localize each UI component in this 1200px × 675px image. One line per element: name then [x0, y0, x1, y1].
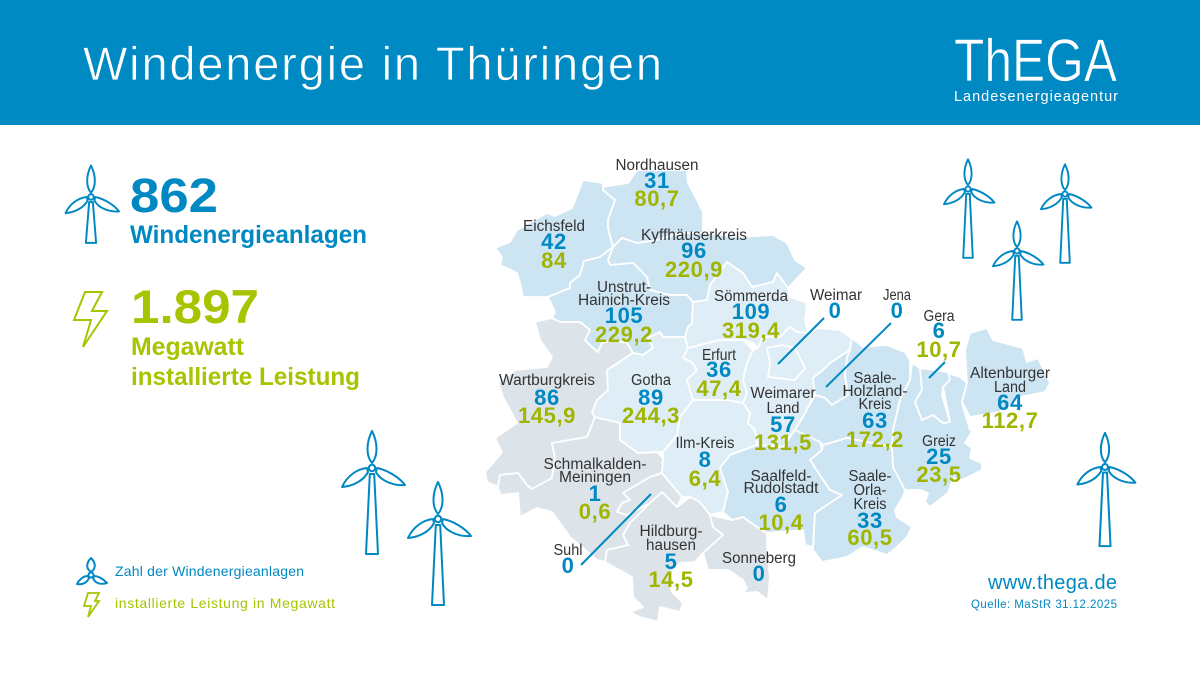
label: Saale-Holzland-Kreis — [842, 370, 908, 452]
label: Saale-Orla-Kreis: Kreis — [854, 496, 887, 513]
label: Greiz: 23,5 — [916, 462, 962, 487]
region: Erfurt — [683, 340, 753, 403]
label: Saalfeld-Rudolstadt — [744, 468, 819, 535]
label: Weimar: Weimar — [810, 287, 862, 304]
label: Hildburghausen: Hildburg- — [640, 523, 702, 540]
label: Erfurt: 36 — [706, 357, 732, 382]
title: Windenergie in Thüringen — [83, 37, 662, 90]
icon: wind turbine, bottom left 1 — [342, 431, 405, 554]
label: Saale-Holzland-Kreis: Saale- — [854, 370, 896, 387]
total turbines: Windenergieanlagen — [130, 221, 367, 249]
icon: wind turbine, top right 2 — [1041, 164, 1091, 263]
label: Saalfeld-Rudolstadt: Saalfeld- — [750, 468, 812, 485]
label: Hildburghausen: 5 — [665, 549, 677, 574]
total megawatt — [131, 280, 360, 391]
legend — [77, 558, 335, 617]
legend text: megawatt: installierte Leistung in Megawatt — [115, 595, 335, 611]
icon: legend bolt — [84, 593, 99, 617]
icon: wind turbine, top right 1 — [944, 159, 994, 258]
region: Hildburghausen — [605, 492, 723, 622]
label: Greiz: 25 — [926, 444, 952, 469]
label: Wartburgkreis — [499, 372, 595, 428]
icon: wind turbine, bottom right — [1077, 433, 1135, 546]
label: Suhl: Suhl — [554, 542, 582, 559]
label: Wartburgkreis: 145,9 — [518, 403, 576, 428]
total turbines — [130, 170, 367, 249]
label: Saale-Orla-Kreis: 60,5 — [847, 525, 893, 550]
label: Nordhausen: 80,7 — [634, 186, 680, 211]
label: Wartburgkreis: Wartburgkreis — [499, 372, 595, 389]
label: Unstrut-Hainich-Kreis: Hainich-Kreis — [578, 292, 670, 309]
region: Saalfeld-Rudolstadt — [720, 430, 842, 547]
region: Jena — [813, 350, 850, 405]
label: Weimarer Land: Weimarer — [750, 385, 816, 402]
label: Altenburger Land — [970, 365, 1050, 433]
region: Saale-Orla-Kreis — [810, 438, 912, 562]
region: Nordhausen — [603, 170, 703, 247]
label: Saale-Holzland-Kreis: 63 — [862, 408, 888, 433]
label: Weimarer Land: 131,5 — [754, 430, 812, 455]
region: Schmalkalden-Meiningen — [498, 417, 663, 562]
region: Weimarer Land — [743, 327, 852, 447]
label: Weimarer Land: 57 — [770, 412, 796, 437]
label: Saalfeld-Rudolstadt: Rudolstadt — [744, 480, 819, 497]
label: Unstrut-Hainich-Kreis — [578, 279, 670, 347]
label: Weimar: 0 — [829, 298, 841, 323]
total turbines: 862 — [130, 170, 218, 223]
region: Weimar — [767, 345, 805, 380]
label: Ilm-Kreis: Ilm-Kreis — [676, 435, 735, 452]
label: Sonneberg: 0 — [753, 561, 765, 586]
label: Greiz: Greiz — [922, 433, 956, 450]
label: Nordhausen: 31 — [644, 168, 670, 193]
icon: legend rotor — [77, 558, 107, 584]
label: Saale-Orla-Kreis: 33 — [857, 508, 883, 533]
label: Gera — [916, 308, 962, 362]
label: Saale-Holzland-Kreis: Kreis — [858, 396, 892, 413]
label: Sömmerda — [714, 288, 788, 343]
icon: wind turbine, top right 3 — [993, 221, 1043, 320]
label: Schmalkalden-Meiningen: 0,6 — [579, 499, 611, 524]
label: Erfurt: 47,4 — [696, 376, 742, 401]
website and source — [971, 572, 1117, 611]
label: Weimarer Land — [750, 385, 816, 455]
label: Erfurt — [696, 347, 742, 401]
label: Ilm-Kreis — [676, 435, 735, 491]
website and source: Quelle: MaStR 31.12.2025 — [971, 599, 1117, 611]
label: Saalfeld-Rudolstadt: 10,4 — [758, 510, 804, 535]
label: Ilm-Kreis: 6,4 — [689, 466, 721, 491]
label: Nordhausen — [616, 157, 698, 211]
label: Kyffhäuserkreis — [641, 227, 747, 282]
region: Greiz — [892, 363, 982, 507]
header band — [0, 0, 1200, 125]
label: Sömmerda: Sömmerda — [714, 288, 788, 305]
icon: lightning bolt — [74, 292, 107, 347]
label: Altenburger Land: 112,7 — [982, 408, 1038, 433]
label: Weimar — [810, 287, 862, 323]
label: Weimarer Land: Land — [766, 400, 800, 417]
region: Wartburgkreis — [485, 318, 633, 489]
total megawatt: 1.897 — [131, 280, 259, 333]
label: Jena: 0 — [891, 298, 903, 323]
label: Suhl — [554, 542, 582, 578]
label: Schmalkalden-Meiningen — [544, 456, 646, 524]
region: Sömmerda — [685, 262, 808, 348]
label: Sömmerda: 319,4 — [722, 318, 780, 343]
label: Ilm-Kreis: 8 — [699, 447, 711, 472]
label: Saale-Orla-Kreis — [847, 468, 893, 550]
label: Unstrut-Hainich-Kreis: 105 — [605, 303, 643, 328]
label: Kyffhäuserkreis: 220,9 — [665, 257, 723, 282]
label: Saalfeld-Rudolstadt: 6 — [775, 492, 787, 517]
label: Gotha: 89 — [638, 385, 664, 410]
label: Hildburghausen — [640, 523, 702, 592]
label: Sonneberg: Sonneberg — [722, 550, 796, 567]
label: Gotha — [622, 372, 680, 428]
label: Schmalkalden-Meiningen: Meiningen — [559, 469, 631, 486]
label: Altenburger Land: Land — [994, 379, 1026, 396]
label: Sonneberg — [722, 550, 796, 586]
label: Altenburger Land: 64 — [997, 390, 1023, 415]
region: Altenburger Land — [962, 328, 1050, 417]
logo: ThEGA: Landesenergieagentur — [954, 89, 1118, 105]
label: Kyffhäuserkreis: Kyffhäuserkreis — [641, 227, 747, 244]
leader lines — [581, 318, 945, 565]
label: Sömmerda: 109 — [732, 299, 770, 324]
map of Thüringen — [485, 170, 1050, 622]
region: Suhl — [617, 473, 682, 515]
label: Unstrut-Hainich-Kreis: 229,2 — [595, 322, 653, 347]
label: Altenburger Land: Altenburger — [970, 365, 1050, 382]
label: Nordhausen: Nordhausen — [616, 157, 698, 174]
label: Kyffhäuserkreis: 96 — [681, 238, 707, 263]
label: Jena: Jena — [883, 287, 911, 304]
label: Erfurt: Erfurt — [702, 347, 737, 364]
label: Gotha: 244,3 — [622, 403, 680, 428]
region: Eichsfeld — [495, 180, 615, 297]
label: Jena — [883, 287, 911, 323]
region: Saale-Holzland-Kreis — [795, 338, 910, 447]
region: Kyffhäuserkreis — [608, 233, 807, 302]
region: Sonneberg — [703, 515, 770, 600]
total megawatt: Megawatt — [131, 333, 245, 361]
label: Hildburghausen: 14,5 — [648, 567, 694, 592]
label: Saale-Orla-Kreis: Orla- — [854, 482, 886, 499]
label: Gotha: Gotha — [631, 372, 671, 389]
label: Saale-Holzland-Kreis: 172,2 — [846, 427, 904, 452]
label: Gera: 10,7 — [916, 337, 962, 362]
label: Eichsfeld: 42 — [541, 229, 567, 254]
region: Ilm-Kreis — [662, 400, 757, 515]
total megawatt: installierte Leistung — [131, 363, 360, 391]
label: Eichsfeld: Eichsfeld — [523, 218, 585, 235]
label: Eichsfeld — [523, 218, 585, 273]
website and source: www.thega.de — [987, 572, 1117, 594]
region: Unstrut-Hainich-Kreis — [548, 247, 693, 355]
label: Schmalkalden-Meiningen: Schmalkalden- — [544, 456, 646, 473]
label: Greiz — [916, 433, 962, 487]
label: Eichsfeld: 84 — [541, 248, 567, 273]
icon: wind turbine, large left — [66, 166, 119, 243]
label: Saale-Orla-Kreis: Saale- — [848, 468, 892, 485]
label: Gera: 6 — [933, 318, 945, 343]
label: Suhl: 0 — [562, 553, 574, 578]
label: Saale-Holzland-Kreis: Holzland- — [842, 383, 908, 400]
region: Gera — [915, 368, 950, 423]
legend text: turbines: Zahl der Windenergieanlagen — [115, 563, 304, 579]
label: Wartburgkreis: 86 — [534, 385, 560, 410]
logo: ThEGA: ThEGA — [954, 27, 1117, 94]
label: Schmalkalden-Meiningen: 1 — [589, 481, 601, 506]
label: Gera: Gera — [924, 308, 955, 325]
icon: wind turbine, bottom left 2 — [408, 482, 471, 605]
label: Unstrut-Hainich-Kreis: Unstrut- — [597, 279, 651, 296]
label: Hildburghausen: hausen — [646, 537, 696, 554]
region: Gotha — [592, 332, 697, 453]
